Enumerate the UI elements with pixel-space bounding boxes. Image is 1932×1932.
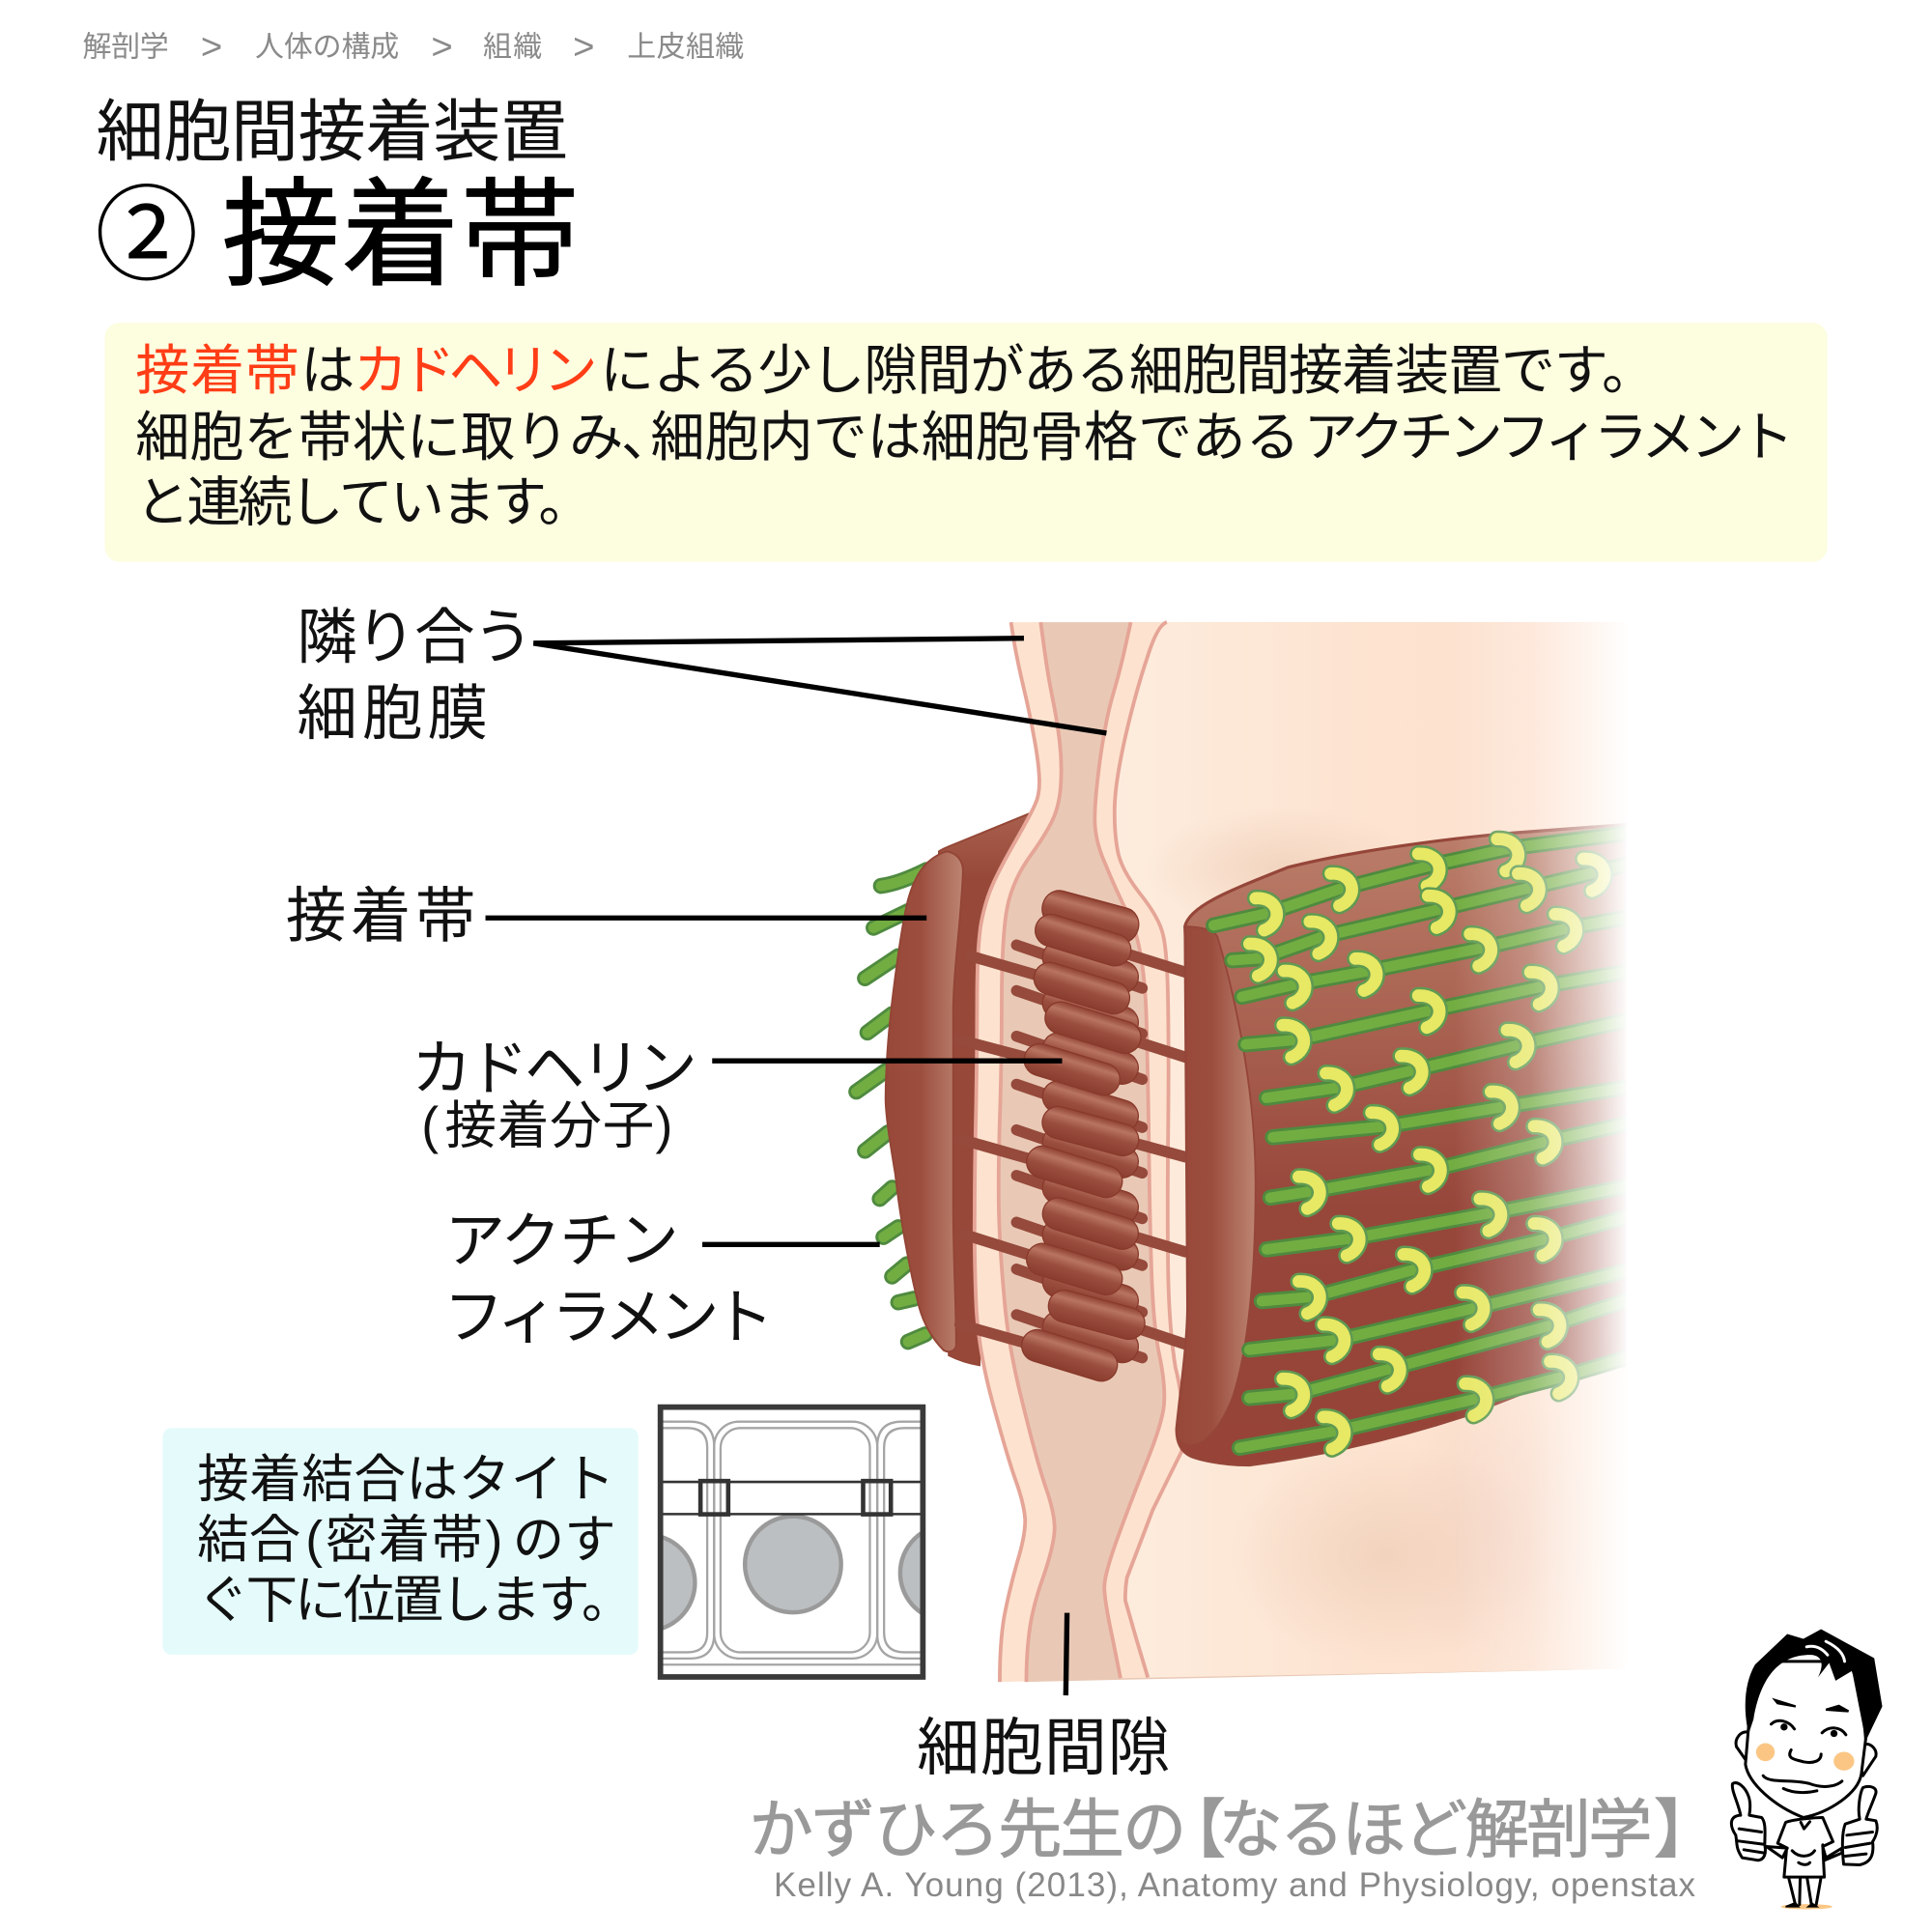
explanation text line 1: による少し隙間がある細胞間接着装置です。 bbox=[600, 340, 1656, 401]
face bbox=[1746, 1662, 1866, 1817]
label: cadherin bbox=[412, 1036, 1062, 1155]
callout: position note: ) bbox=[486, 1512, 502, 1569]
left band face bbox=[886, 851, 963, 1351]
breadcrumb bbox=[82, 26, 744, 68]
footer brand title bbox=[750, 1795, 1718, 1866]
title: main heading: ② bbox=[95, 178, 198, 294]
breadcrumb: > bbox=[431, 26, 453, 68]
left band back rim bbox=[939, 813, 1037, 1365]
cadherin molecules bbox=[1018, 887, 1149, 1385]
actin filaments on right belt bbox=[1213, 832, 1638, 1449]
callout: position note: ( bbox=[305, 1512, 323, 1569]
breadcrumb: > bbox=[573, 26, 594, 68]
callout: position note: 接着結合はタイト bbox=[197, 1452, 614, 1509]
callout: position note: 密着帯 bbox=[326, 1512, 483, 1569]
explanation text line 3: と連続しています。 bbox=[135, 472, 593, 533]
label: intercellular space: 細胞間隙 bbox=[917, 1713, 1171, 1783]
callout: position note: ぐ下に位置します。 bbox=[197, 1573, 634, 1630]
callout: position note: 結合 bbox=[197, 1512, 300, 1569]
explanation text line 2: 細胞内では細胞骨格である bbox=[650, 407, 1300, 468]
legs bbox=[1789, 1877, 1821, 1904]
label: adjacent cell membranes: 細胞膜 bbox=[297, 680, 488, 748]
explanation text line 1 bbox=[135, 340, 1656, 401]
footer brand title: かずひろ先生の bbox=[750, 1795, 1186, 1866]
footer brand title: 】 bbox=[1654, 1795, 1718, 1866]
label: actin filament bbox=[443, 1208, 880, 1351]
actin stubs on left band bbox=[856, 870, 926, 1342]
panel: explanation bbox=[104, 323, 1828, 562]
footer credit: Kelly A. Young (2013), Anatomy and Physiology, openstax bbox=[774, 1866, 1696, 1904]
label: adhesion belt: 接着帯 bbox=[286, 882, 475, 950]
thumbs-up hands bbox=[1731, 1783, 1765, 1861]
footer brand title: 【 bbox=[1162, 1795, 1226, 1866]
breadcrumb: 人体の構成 bbox=[255, 32, 399, 64]
ears bbox=[1736, 1732, 1752, 1759]
breadcrumb: > bbox=[201, 26, 222, 68]
callout: position note bbox=[162, 1428, 639, 1655]
label: cadherin: 接着分子 bbox=[444, 1098, 654, 1155]
label: cadherin: ( bbox=[421, 1098, 439, 1155]
explanation text line 1: 接着帯 bbox=[135, 340, 299, 401]
title: main heading: 接着帯 bbox=[222, 169, 579, 301]
explanation text line 2: アクチンフィラメント bbox=[1303, 407, 1794, 468]
breadcrumb: 解剖学 bbox=[82, 32, 169, 64]
explanation text line 2 bbox=[135, 407, 1794, 468]
cadherin rods bbox=[960, 940, 1185, 1358]
icon: cartoon doctor bbox=[1731, 1630, 1883, 1909]
footer brand title: なるほど解剖学 bbox=[1218, 1795, 1652, 1866]
body bbox=[1767, 1817, 1842, 1877]
label: cadherin: ) bbox=[656, 1098, 672, 1155]
callout: position note: のす bbox=[513, 1512, 616, 1569]
explanation text line 2: 、 bbox=[621, 407, 675, 468]
explanation text line 1: カドヘリン bbox=[354, 340, 598, 401]
label: actin filament: フィラメント bbox=[443, 1284, 774, 1351]
breadcrumb: 上皮組織 bbox=[627, 32, 744, 64]
explanation text line 2: 細胞を帯状に取りみ bbox=[135, 407, 623, 468]
label: adjacent cell membranes bbox=[297, 604, 1106, 748]
diagram: cell junction illustration bbox=[856, 610, 1663, 1694]
label: cadherin: カドヘリン bbox=[412, 1036, 697, 1103]
breadcrumb: 組織 bbox=[483, 32, 542, 64]
label: actin filament: アクチン bbox=[444, 1208, 679, 1275]
label: adjacent cell membranes: 隣り合う bbox=[297, 604, 533, 671]
hair bbox=[1746, 1630, 1883, 1744]
right-side white fade bbox=[1454, 610, 1645, 1694]
explanation text line 1: は bbox=[300, 340, 355, 401]
inset: cell schematic bbox=[657, 1405, 925, 1680]
cell membranes and intercellular gap bbox=[975, 622, 1645, 1682]
facial features bbox=[1776, 1700, 1849, 1712]
title: subject heading: 細胞間接着装置 bbox=[96, 94, 568, 170]
right adhesion belt bbox=[1177, 823, 1645, 1465]
